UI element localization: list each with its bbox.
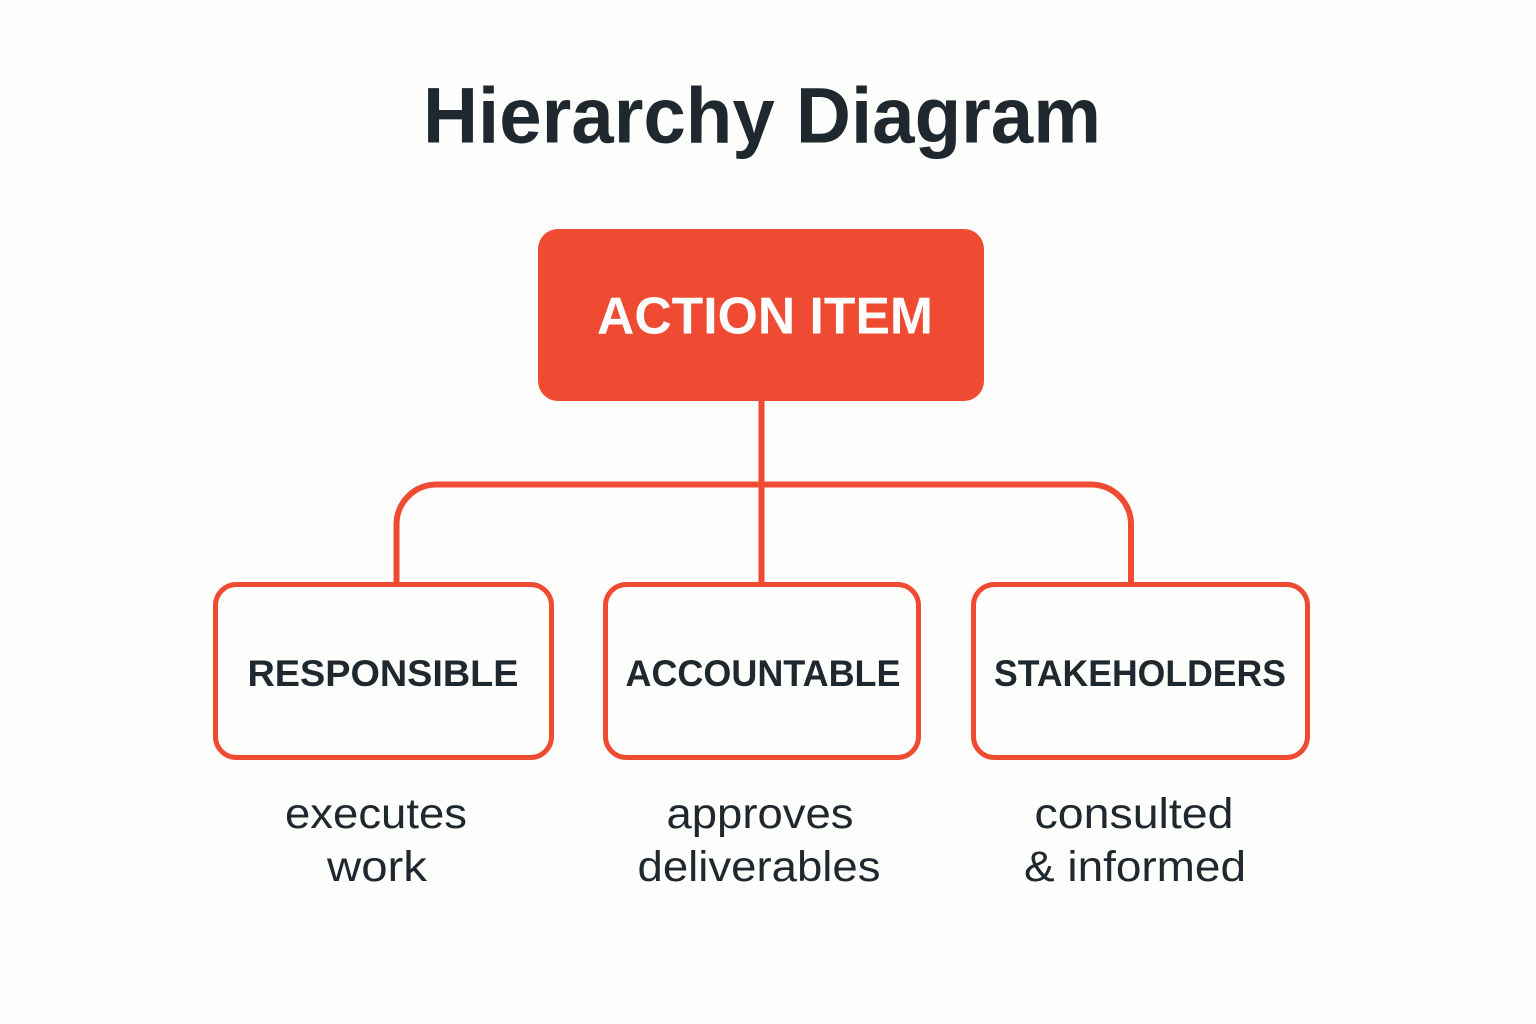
title: Hierarchy Diagram bbox=[423, 70, 1101, 160]
box: stakeholders: STAKEHOLDERS bbox=[994, 653, 1286, 694]
connector lines bbox=[396, 400, 1131, 583]
description: stakeholders: consulted bbox=[1034, 790, 1234, 838]
description: stakeholders bbox=[1024, 790, 1246, 891]
box: action item: ACTION ITEM bbox=[597, 288, 933, 346]
box: accountable: ACCOUNTABLE bbox=[626, 653, 900, 694]
box: stakeholders bbox=[974, 584, 1308, 758]
description: accountable bbox=[638, 790, 880, 891]
box: responsible: RESPONSIBLE bbox=[248, 653, 518, 694]
description: stakeholders: & informed bbox=[1024, 843, 1246, 891]
description: responsible: work bbox=[326, 843, 428, 891]
description: responsible: executes bbox=[285, 790, 467, 838]
box: responsible bbox=[216, 584, 552, 758]
description: responsible bbox=[285, 790, 467, 891]
box: action item bbox=[538, 229, 984, 401]
description: accountable: deliverables bbox=[638, 843, 880, 891]
description: accountable: approves bbox=[666, 790, 854, 838]
box: accountable bbox=[606, 584, 918, 758]
